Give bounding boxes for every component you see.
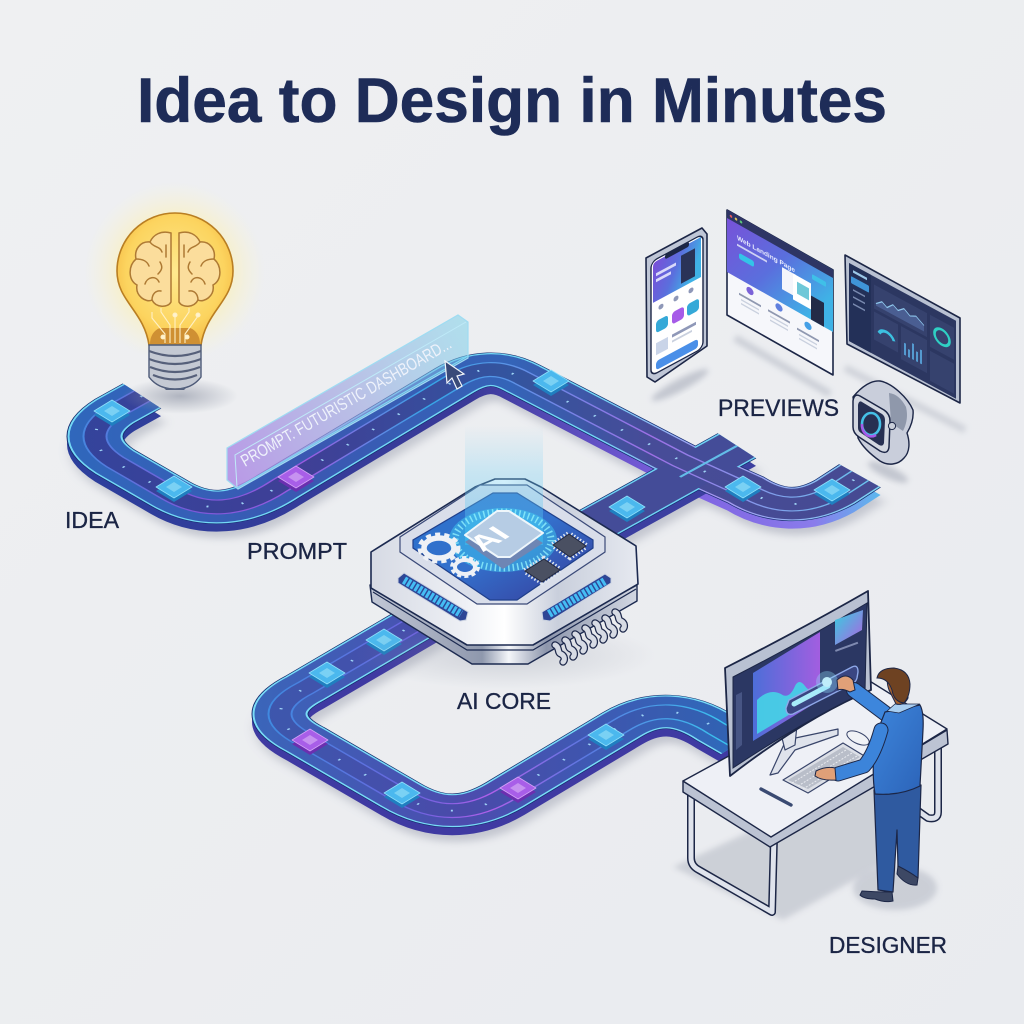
circuit glow — [449, 508, 557, 572]
title: Idea to Design in Minutes — [137, 66, 887, 136]
core circuit screen — [413, 493, 593, 600]
designer workstation — [673, 591, 948, 920]
label: DESIGNER: DESIGNER — [829, 932, 947, 958]
connector pins — [555, 612, 624, 662]
device: smartwatch preview — [853, 381, 913, 487]
desk legs — [691, 740, 938, 912]
track: upper pipeline from idea to previews — [94, 370, 864, 548]
track chips — [94, 370, 850, 522]
icon: cursor — [445, 361, 464, 389]
AI core processor — [355, 425, 655, 689]
label: IDEA: IDEA — [65, 507, 120, 533]
device: phone preview — [646, 228, 711, 405]
lower hand — [815, 767, 836, 780]
beam of light — [465, 425, 543, 545]
microchips — [525, 534, 586, 582]
dashboard line chart — [874, 284, 927, 337]
watch ring — [862, 413, 880, 435]
AI chip — [461, 511, 543, 569]
pen — [761, 789, 791, 805]
keyboard — [783, 743, 866, 793]
track: lower pipeline from AI core to designer — [280, 615, 744, 825]
device: tablet dashboard preview — [845, 255, 965, 430]
core side wall — [370, 585, 637, 664]
lower track chips — [292, 629, 624, 808]
core top plate — [371, 479, 638, 645]
mouse — [845, 728, 871, 748]
watch case — [853, 395, 890, 452]
bulb screw base — [149, 345, 201, 390]
head — [887, 672, 908, 704]
monitor artwork — [753, 632, 820, 741]
prompt text: PROMPT: FUTURISTIC DASHBOARD... — [238, 334, 455, 470]
monitor stand — [770, 725, 838, 775]
web hero text: Web Landing Page — [737, 235, 795, 274]
label: AI CORE: AI CORE — [457, 688, 551, 714]
brain — [130, 232, 220, 306]
collar — [887, 704, 920, 713]
lower arm — [838, 730, 881, 774]
designer figure — [815, 668, 923, 902]
icon: idea lightbulb with brain — [85, 182, 265, 414]
gears — [420, 535, 478, 576]
circuit traces — [152, 308, 200, 343]
raised arm — [854, 690, 886, 714]
label: PROMPT: PROMPT — [247, 538, 347, 564]
prompt input panel — [227, 315, 468, 489]
watch strap — [853, 381, 913, 464]
torso — [873, 705, 923, 794]
desk floor shadow — [673, 770, 890, 920]
AI chip: AI — [461, 522, 517, 556]
hand on slider — [837, 676, 855, 692]
legs — [874, 785, 921, 892]
light bars — [398, 573, 611, 621]
shoes — [860, 891, 893, 902]
desk top — [683, 680, 948, 847]
phone screen header — [653, 237, 701, 303]
device: web landing page preview — [727, 210, 833, 394]
core inner ring — [400, 485, 605, 604]
label: PREVIEWS: PREVIEWS — [718, 395, 839, 422]
floating slider — [786, 666, 858, 714]
curved monitor — [725, 591, 871, 776]
